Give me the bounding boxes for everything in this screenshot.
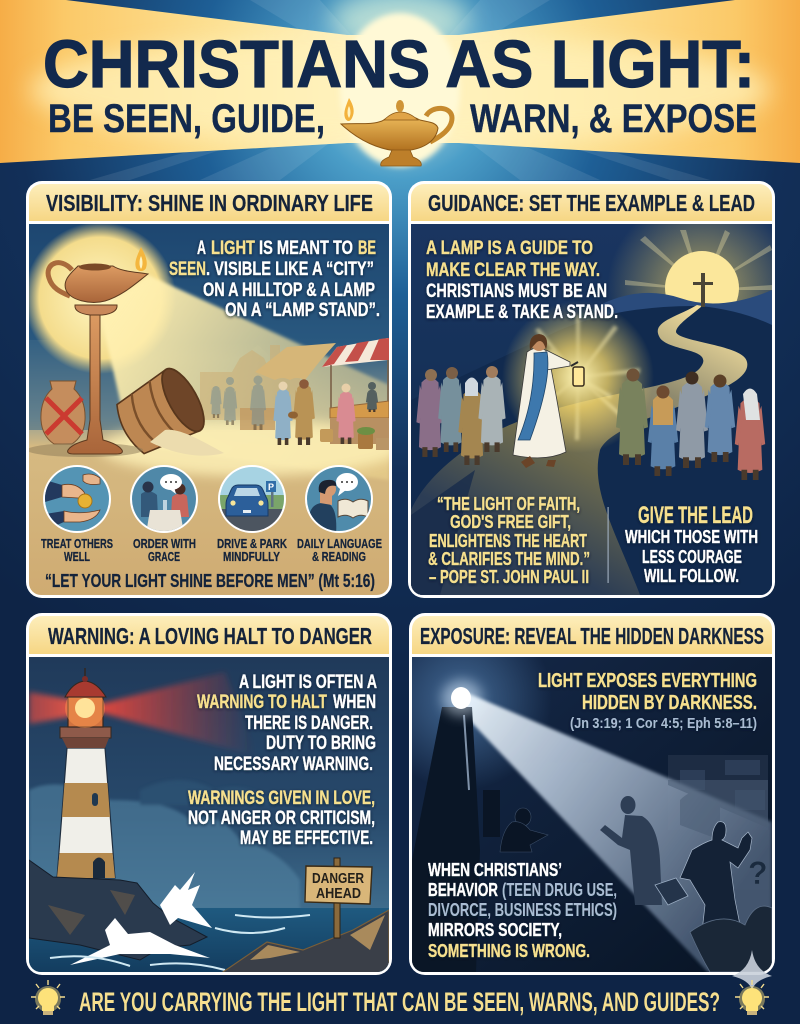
panel text: NECESSARY WARNING. [214, 753, 373, 775]
panel header [411, 184, 772, 221]
icon: light bulb right [735, 980, 769, 1015]
clouds [29, 780, 300, 910]
icon: drive and park: P [268, 482, 274, 492]
icon: order with grace [130, 465, 198, 534]
right rocks [223, 910, 389, 975]
panel text top: (Jn 3:19; 1 Cor 4:5; Eph 5:8–11) [570, 715, 757, 732]
pope quote: ENLIGHTENS THE HEART [429, 531, 587, 551]
icon labels: WELL [64, 550, 90, 564]
panel text: A LIGHT IS OFTEN A [239, 671, 377, 693]
panel text: CHRISTIANS MUST BE AN [426, 280, 607, 302]
panel text bottom: DIVORCE, BUSINESS ETHICS) [428, 899, 617, 920]
subtitle left: BE SEEN, GUIDE, [48, 97, 325, 141]
give the lead [625, 502, 758, 586]
shelf [668, 755, 768, 830]
illustration: spotlight revealing figures [372, 610, 772, 972]
icon: daily language and reading [305, 465, 373, 535]
near hill [411, 306, 772, 595]
illustration: lighthouse on rocks [29, 657, 389, 978]
icon labels: & READING [312, 550, 366, 564]
town in beam [200, 345, 300, 420]
panel text: A LAMP IS A GUIDE TO [426, 237, 593, 259]
icon labels: TREAT OTHERS [41, 537, 113, 551]
panel text: WHEN [333, 691, 376, 713]
panel text top [538, 670, 757, 732]
illustration: lamp on stand over market [24, 222, 400, 595]
panel text: WARNING TO HALT [197, 691, 327, 713]
striped awning [322, 338, 389, 408]
woman and man talking [273, 379, 378, 445]
panel text bottom: (TEEN DRUG USE, [502, 879, 617, 900]
baskets and produce [320, 427, 389, 450]
followers right [616, 368, 765, 480]
panel text: MAKE CLEAR THE WAY. [426, 259, 600, 281]
illustration: leader with lantern on the road [411, 224, 772, 595]
panel text: SEEN [169, 258, 206, 280]
pope quote [428, 494, 590, 587]
danger sign: AHEAD [316, 886, 361, 902]
shelf seen through beam [668, 780, 768, 840]
spotlight beam [456, 690, 772, 972]
halo [24, 222, 176, 374]
lamp head [442, 680, 482, 716]
panel text: LIGHT [211, 237, 255, 259]
ground [100, 420, 400, 476]
panel: guidance [408, 181, 797, 598]
icon: treat others well [43, 465, 111, 533]
followers left [416, 366, 506, 465]
icon labels [41, 537, 382, 564]
town silhouette [29, 340, 290, 430]
panel text: THERE IS DANGER. [245, 712, 373, 734]
cross [693, 273, 713, 307]
panel header [29, 616, 389, 654]
pope quote: “THE LIGHT OF FAITH, [437, 494, 580, 514]
lighthouse [57, 668, 115, 878]
heading: VISIBILITY: SHINE IN ORDINARY LIFE [46, 190, 373, 216]
icon labels: DAILY LANGUAGE [297, 537, 382, 551]
panel: exposure [372, 610, 775, 975]
sun rays [90, 0, 710, 180]
centre glow above banner [330, 0, 470, 50]
sun glow [612, 224, 772, 302]
panel text bottom [428, 859, 617, 961]
panel text: NOT ANGER OR CRITICISM, [188, 807, 375, 829]
panel text: . VISIBLE LIKE A “CITY” [206, 258, 374, 280]
dark lower-left shade [411, 470, 475, 595]
leader figure [513, 334, 570, 468]
panel text: A [197, 237, 206, 259]
danger sign: DANGER [312, 871, 364, 887]
panel text [426, 237, 618, 323]
scripture quote: “LET YOUR LIGHT SHINE BEFORE MEN” (Mt 5:16) [45, 571, 375, 591]
danger sign [305, 858, 372, 938]
market awning [255, 343, 336, 380]
icon labels: DRIVE & PARK [217, 537, 287, 551]
lantern [571, 362, 584, 386]
left rocks [29, 860, 207, 960]
icon: drive and park [218, 465, 286, 533]
panel text [188, 671, 377, 849]
distant hills [600, 290, 772, 325]
icon labels: ORDER WITH [133, 537, 196, 551]
panel text: ON A HILLTOP & A LAMP [203, 279, 375, 301]
panel header [29, 184, 389, 221]
fleeing man with briefcase [655, 822, 752, 950]
panel text: MAY BE EFFECTIVE. [240, 827, 373, 849]
panel text: IS MEANT TO [259, 237, 353, 259]
give the lead: WILL FOLLOW. [644, 565, 739, 586]
market people [210, 376, 266, 430]
pope quote: – POPE ST. JOHN PAUL II [429, 567, 589, 587]
panel text: BE [358, 237, 376, 259]
panel text bottom: MIRRORS SOCIETY, [428, 919, 562, 940]
panel text bottom: WHEN CHRISTIANS’ [428, 859, 562, 880]
panel text bottom: SOMETHING IS WRONG. [428, 940, 590, 961]
icon: oil lamp [341, 98, 452, 166]
icon: light bulb left [31, 980, 65, 1015]
heading: WARNING: A LOVING HALT TO DANGER [48, 623, 372, 649]
panel text: DUTY TO BRING [266, 732, 376, 754]
sea [29, 908, 389, 978]
red beams [29, 671, 246, 751]
lamp post [412, 707, 480, 972]
waves [70, 872, 212, 965]
basket spilled [116, 368, 224, 456]
lamp and stand [27, 247, 148, 457]
pope quote: & CLARIFIES THE MIND.” [428, 549, 590, 569]
stall table [330, 401, 389, 418]
panel text: WARNINGS GIVEN IN LOVE, [188, 787, 375, 809]
panel text [169, 237, 380, 321]
light beam [100, 275, 389, 480]
title line 1: CHRISTIANS AS LIGHT: [43, 27, 755, 102]
kneeling figure [483, 790, 548, 852]
title banner [0, 0, 800, 167]
panel header [412, 616, 772, 654]
sparkle [732, 950, 772, 990]
jar with red X [41, 381, 85, 444]
panel: warning [26, 613, 392, 978]
panel text bottom: BEHAVIOR [428, 879, 498, 900]
give the lead: LESS COURAGE [642, 546, 742, 567]
panel text: ON A “LAMP STAND”. [225, 299, 380, 321]
standing man [600, 796, 662, 905]
panel text: EXAMPLE & TAKE A STAND. [426, 301, 618, 323]
icon labels: MINDFULLY [223, 550, 281, 564]
bags [690, 906, 772, 972]
question mark: ? [748, 855, 768, 891]
icon labels: GRACE [148, 550, 180, 564]
pope quote: GOD'S FREE GIFT, [450, 512, 571, 532]
lantern glow and rays [502, 301, 654, 453]
winding road [411, 305, 747, 595]
panel: visibility [24, 181, 400, 598]
